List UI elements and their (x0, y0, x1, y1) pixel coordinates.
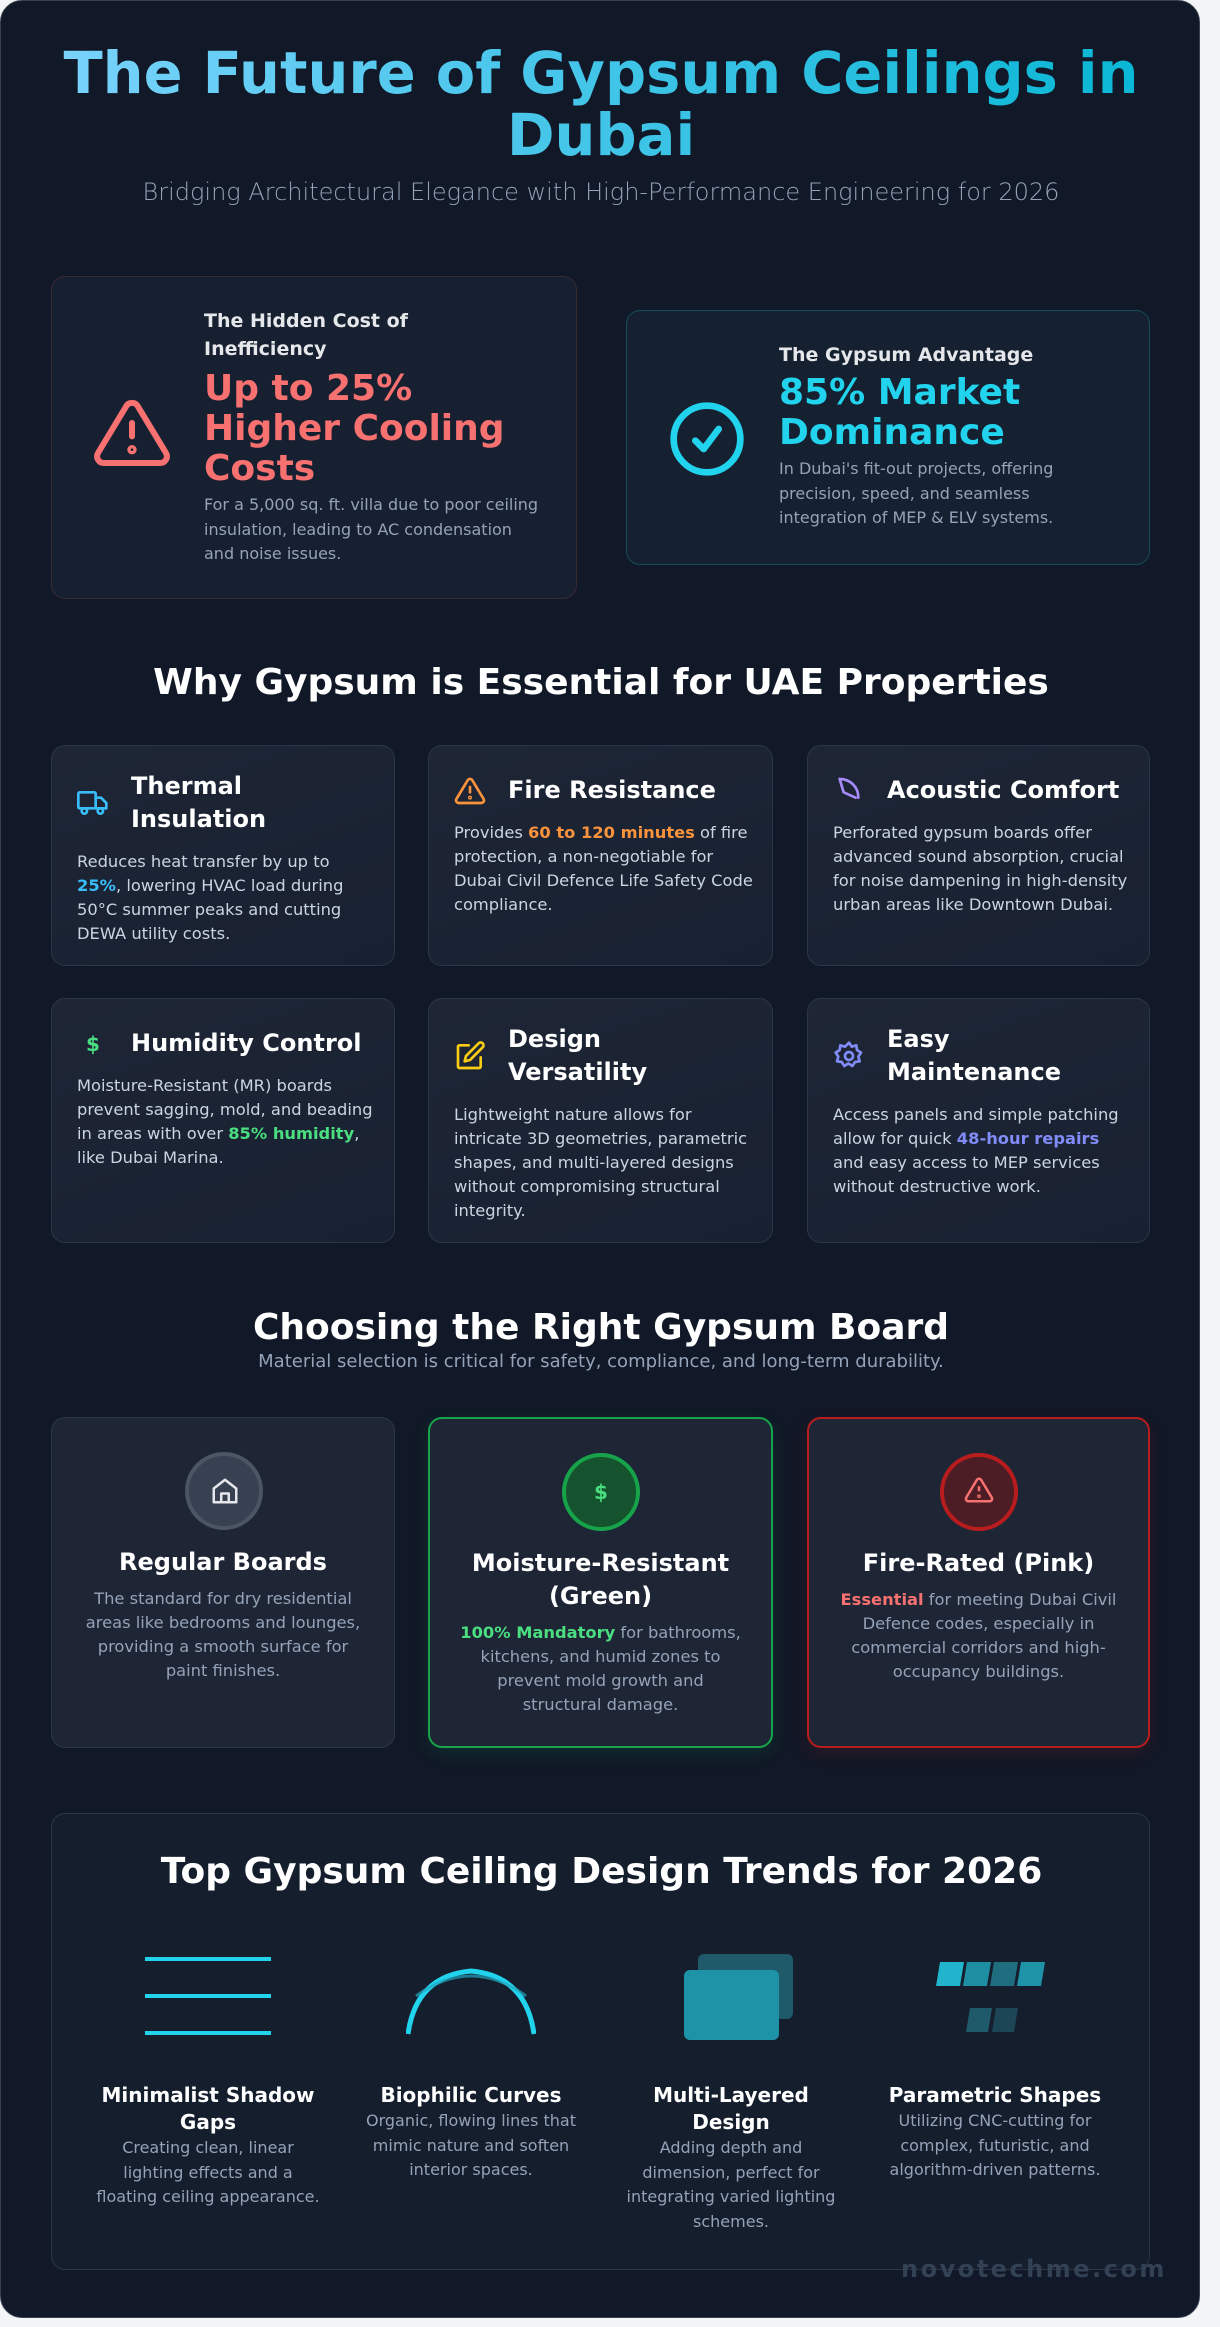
header: fire: Fire Resistance (508, 776, 716, 804)
card: humidity (51, 998, 395, 1243)
board: regular: Regular Boards (119, 1548, 327, 1576)
card: acoustic: Perforated gypsum boards offer advanced sound absorption, crucial for noise dampening in high-density urban areas like Downtown Dubai. (833, 823, 1127, 914)
text: advantage: The Gypsum Advantage (779, 344, 1033, 366)
header: design: Design Versatility (508, 1025, 647, 1086)
card: fire: Provides 60 to 120 minutes of fire protection, a non-negotiable for Dubai Civil Defence Life Safety Code compliance. (454, 823, 753, 914)
trend: minimalist: Creating clean, linear lighting effects and a floating ceiling appearance. (96, 2138, 320, 2206)
board: moisture: Moisture-Resistant (Green) (472, 1549, 729, 1610)
heading: choosing: Choosing the Right Gypsum Board (253, 1307, 949, 1348)
icon: dollar circle: $ (594, 1480, 608, 1504)
trend: biophilic: Biophilic Curves (380, 2083, 562, 2107)
subtitle: Bridging Architectural Elegance with High-Performance Engineering for 2026 (143, 178, 1059, 206)
panel: gypsum advantage (626, 310, 1150, 565)
card: maintenance (807, 998, 1150, 1243)
card: design: Lightweight nature allows for intricate 3D geometries, parametric shapes, and multi-layered designs without compromising structural integrity. (454, 1105, 747, 1220)
watermark: novotechme.com (901, 2255, 1167, 2283)
trend: minimalist (96, 1957, 320, 2206)
header: thermal: Thermal Insulation (131, 772, 266, 833)
heading: trends: Top Gypsum Ceiling Design Trends for 2026 (161, 1851, 1042, 1892)
text: advantage: 85% Market Dominance (779, 372, 1020, 453)
card: humidity: Moisture-Resistant (MR) boards prevent sagging, mold, and beading in areas with over 85% humidity, like Dubai Marina. (77, 1076, 373, 1167)
icon: warning (94, 400, 170, 466)
board: regular: The standard for dry residential areas like bedrooms and lounges, providing a smooth surface for paint finishes. (86, 1589, 360, 1680)
header: humidity: Humidity Control (131, 1029, 362, 1057)
text: hidden cost: For a 5,000 sq. ft. villa due to poor ceiling insulation, leading to AC condensation and noise issues. (204, 495, 538, 563)
icon: dollar circle (562, 1453, 640, 1531)
trend: biophilic (366, 1968, 576, 2179)
card: thermal (51, 745, 395, 966)
trend: minimalist: Minimalist Shadow Gaps (102, 2083, 314, 2134)
trend: parametric: Parametric Shapes (889, 2083, 1101, 2107)
panel: trends (51, 1813, 1150, 2270)
icon: house (185, 1452, 263, 1530)
text: hidden cost: Up to 25% Higher Cooling Costs (204, 368, 505, 489)
trend: multi-layered: Adding depth and dimension, perfect for integrating varied lighting schemes. (627, 2138, 835, 2230)
board: fire rated: Essential for meeting Dubai Civil Defence codes, especially in commercial corridors and high-occupancy buildings. (841, 1590, 1116, 1681)
card: fire (428, 745, 773, 966)
card: acoustic (807, 745, 1150, 966)
card: design (428, 998, 773, 1243)
text: hidden cost (204, 310, 538, 563)
heading: why gypsum: Why Gypsum is Essential for UAE Properties (153, 662, 1049, 703)
text: advantage (779, 344, 1053, 527)
board: fire rated: Fire-Rated (Pink) (863, 1549, 1094, 1577)
text: hidden cost: The Hidden Cost of Inefficiency (204, 310, 408, 360)
panel: hidden cost (51, 276, 577, 599)
text: advantage: In Dubai's fit-out projects, offering precision, speed, and seamless integration of MEP & ELV systems. (779, 459, 1053, 527)
card: maintenance: Access panels and simple patching allow for quick 48-hour repairs and easy access to MEP services without destructive work. (833, 1105, 1119, 1196)
board: moisture (428, 1417, 773, 1748)
board: fire rated (807, 1417, 1150, 1748)
trend: parametric (889, 1962, 1101, 2179)
board: moisture: 100% Mandatory for bathrooms, kitchens, and humid zones to prevent mold growth and structural damage. (460, 1623, 741, 1714)
board: regular (51, 1417, 395, 1748)
header: maintenance: Easy Maintenance (887, 1025, 1061, 1086)
trend: multi-layered: Multi-Layered Design (653, 2083, 809, 2134)
header: acoustic: Acoustic Comfort (887, 776, 1119, 804)
card: thermal: Reduces heat transfer by up to 25%, lowering HVAC load during 50°C summer peaks and cutting DEWA utility costs. (77, 852, 343, 943)
title: The Future of Gypsum Ceilings in Dubai (63, 40, 1139, 169)
icon: warning circle (940, 1453, 1018, 1531)
trend: biophilic: Organic, flowing lines that mimic nature and soften interior spaces. (366, 2111, 576, 2179)
trend: parametric: Utilizing CNC-cutting for complex, futuristic, and algorithm-driven patterns. (890, 2111, 1100, 2179)
icon: check circle (670, 402, 744, 476)
trend: multi-layered (627, 1954, 835, 2230)
header: humidity: $ (86, 1032, 100, 1056)
subtitle: choosing: Material selection is critical for safety, compliance, and long-term durability. (258, 1351, 944, 1372)
